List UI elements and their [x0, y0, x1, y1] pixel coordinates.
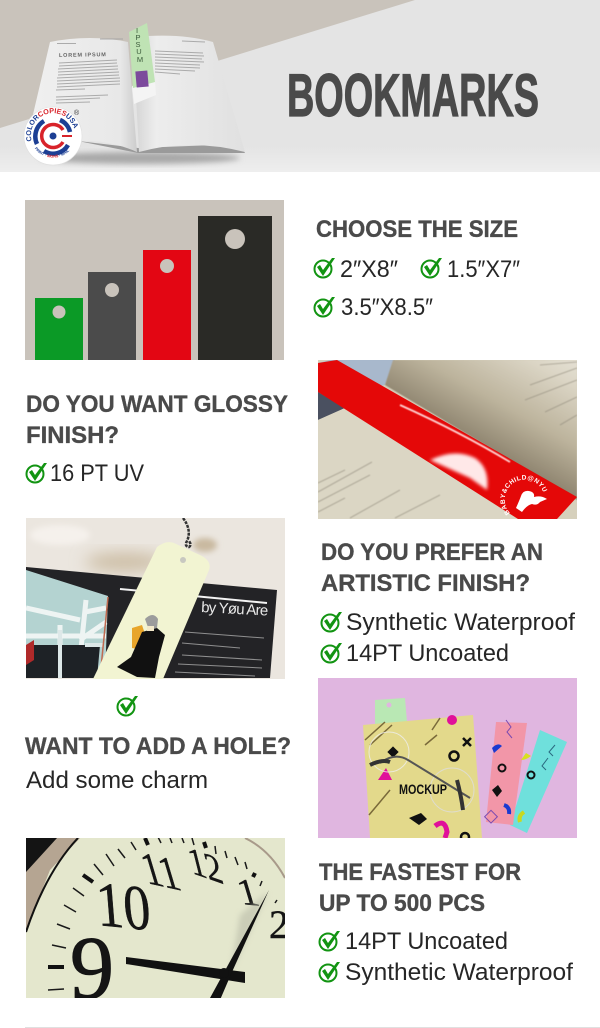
divider [25, 1027, 600, 1028]
book illustration: M [137, 55, 143, 64]
book illustration: P [135, 33, 141, 42]
artistic options [322, 609, 575, 667]
heading: artistic finish: ARTISTIC FINISH? [321, 570, 530, 597]
logo: ColorCopiesUSA badge: COLORCOPIESUSA [26, 108, 78, 142]
option: 16 PT UV: 16 PT UV [50, 460, 144, 487]
book illustration: LOREM IPSUM [59, 52, 107, 59]
logo: ColorCopiesUSA badge [24, 107, 82, 165]
size options: 3.5″X8.5″ [341, 294, 433, 321]
heading: add a hole: WANT TO ADD A HOLE? [25, 733, 291, 760]
heading: glossy finish: DO YOU WANT GLOSSY [26, 391, 288, 418]
header banner [0, 0, 600, 172]
book illustration [27, 23, 245, 164]
size options: 1.5″X7″ [447, 256, 520, 283]
photo: clock face: 1 [232, 871, 264, 915]
heading: choose the size: CHOOSE THE SIZE [316, 216, 518, 243]
heading: fastest: THE FASTEST FOR [319, 859, 521, 886]
size options [314, 256, 520, 321]
photo: clock face: 11 [135, 841, 186, 902]
icon: lone check [118, 696, 138, 716]
heading: fastest: UP TO 500 PCS [319, 890, 485, 917]
artistic options: 14PT Uncoated [346, 640, 509, 667]
photo: glossy red bookmark: BABY&CHILD@NYU [500, 475, 548, 516]
heading: artistic finish [321, 539, 543, 597]
photo: clock face: 12 [183, 839, 227, 894]
photo: clock face: 10 [93, 868, 153, 944]
fastest options: Synthetic Waterproof [345, 959, 573, 986]
photo: glossy red bookmark [318, 360, 577, 519]
photo: colourful mockup bookmarks [318, 678, 577, 841]
heading: glossy finish: FINISH? [26, 422, 119, 449]
fastest options [320, 928, 573, 986]
photo: clock face: 9 [70, 919, 114, 1018]
logo: ColorCopiesUSA badge: PRINT · SIGNS · MAIL [34, 147, 70, 158]
book illustration: S [135, 40, 141, 49]
logo: ColorCopiesUSA badge: ® [74, 109, 80, 117]
size options: 2″X8″ [340, 256, 398, 283]
heading: fastest [319, 859, 521, 917]
photo: colourful mockup bookmarks: MOCKUP [399, 781, 447, 797]
heading: glossy finish [26, 391, 288, 449]
heading: artistic finish: DO YOU PREFER AN [321, 539, 543, 566]
figure [117, 615, 165, 678]
text: add some charm: Add some charm [26, 767, 208, 794]
photo: clock face [26, 838, 285, 998]
photo: clock face: 2 [269, 902, 289, 947]
photo: bookmark with charm and hole: by Yøu Are [201, 599, 269, 620]
book illustration: I [136, 26, 138, 35]
fastest options: 14PT Uncoated [345, 928, 508, 955]
panel: bookmark sizes graphic [25, 200, 284, 360]
photo: bookmark with charm and hole [26, 518, 285, 679]
book illustration: U [136, 47, 142, 56]
artistic options: Synthetic Waterproof [346, 609, 575, 636]
